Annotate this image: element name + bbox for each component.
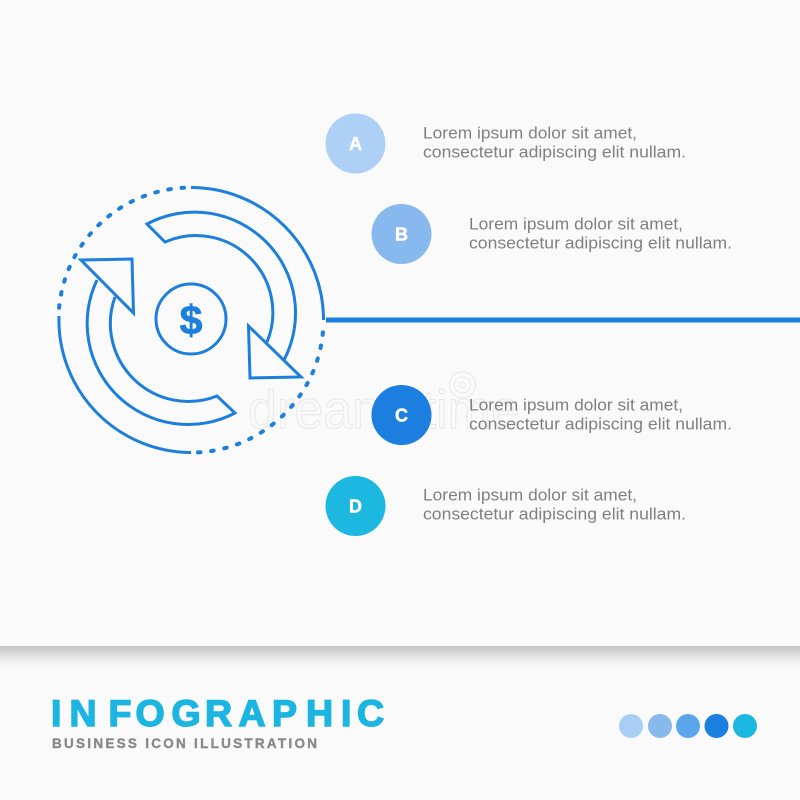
top-right arrow head bbox=[248, 326, 301, 378]
outer ring dotted arcs bbox=[59, 188, 323, 452]
connector line bbox=[326, 318, 800, 322]
text B: Lorem ipsum dolor sit amet, bbox=[469, 216, 683, 234]
bottom-left arrow head bbox=[81, 259, 134, 313]
text D: Lorem ipsum dolor sit amet, bbox=[423, 486, 637, 504]
badge letter D: D bbox=[349, 496, 362, 516]
subtitle: BUSINESS ICON ILLUSTRATION bbox=[52, 736, 317, 751]
watermark: dreamstime bbox=[248, 380, 520, 440]
text A: Lorem ipsum dolor sit amet, bbox=[423, 124, 637, 142]
item A bbox=[326, 114, 686, 174]
text C: consectetur adipiscing elit nullam. bbox=[469, 416, 732, 434]
item C bbox=[372, 385, 732, 445]
text C: Lorem ipsum dolor sit amet, bbox=[469, 396, 683, 414]
top-right arrow band bbox=[147, 212, 296, 360]
item B bbox=[372, 204, 732, 264]
badge letter B: B bbox=[395, 224, 408, 244]
text A: consectetur adipiscing elit nullam. bbox=[423, 144, 686, 162]
dollar sign: $ bbox=[180, 297, 203, 343]
badge letter C: C bbox=[395, 406, 408, 426]
badge C bbox=[372, 385, 432, 445]
title: INFOGRAPHIC bbox=[51, 692, 384, 734]
badge letter A: A bbox=[349, 134, 362, 154]
text B: consectetur adipiscing elit nullam. bbox=[469, 234, 732, 252]
badge A bbox=[326, 114, 386, 174]
footer shadow band bbox=[0, 646, 800, 666]
outer ring solid arcs bbox=[59, 188, 324, 452]
badge D bbox=[326, 476, 386, 536]
badge B bbox=[372, 204, 432, 264]
text D: consectetur adipiscing elit nullam. bbox=[423, 506, 686, 524]
bottom-left arrow band bbox=[87, 280, 235, 425]
center coin bbox=[156, 284, 226, 354]
palette dots bbox=[619, 714, 757, 738]
icon: money exchange cycle bbox=[59, 188, 324, 452]
item D bbox=[326, 476, 686, 536]
